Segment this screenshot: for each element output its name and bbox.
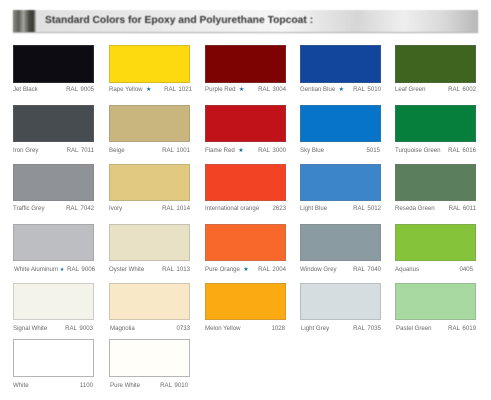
code: RAL 9003: RAL 9003: [65, 325, 93, 332]
label: White Aluminum: White Aluminum ★: [14, 266, 64, 273]
code: RAL 9006: RAL 9006: [67, 266, 95, 273]
swatch: Rape Yellow: [109, 45, 190, 83]
code: RAL 3004: RAL 3004: [258, 86, 286, 93]
label: Oyster White: Oyster White: [109, 266, 144, 273]
swatch: Pure Orange: [205, 224, 286, 261]
swatch: Pure White: [109, 339, 190, 377]
label: Gentian Blue: Gentian Blue ★: [300, 86, 344, 93]
swatch: White Aluminum: [13, 224, 94, 261]
swatch: Traffic Grey: [13, 164, 94, 201]
code: RAL 6002: RAL 6002: [448, 86, 476, 93]
swatch: Leaf Green: [395, 45, 476, 83]
swatch: Aquarius: [395, 224, 476, 261]
label: Flame Red: Flame Red ★: [205, 147, 244, 154]
swatch: Light Grey: [300, 283, 381, 320]
label: Sky Blue: Sky Blue: [300, 147, 324, 154]
code: 0733: 0733: [176, 325, 190, 332]
code: RAL 3000: RAL 3000: [258, 147, 286, 154]
swatch: Iron Grey: [13, 105, 94, 142]
code: RAL 6011: RAL 6011: [449, 205, 476, 212]
swatch: Reseda Green: [395, 164, 476, 201]
label: Melon Yellow: Melon Yellow: [205, 325, 241, 332]
swatch: Magnolia: [109, 283, 190, 320]
code: 0405: 0405: [459, 266, 473, 273]
label: Magnolia: Magnolia: [110, 325, 135, 332]
code: RAL 6019: RAL 6019: [448, 325, 476, 332]
label: Iron Grey: Iron Grey: [13, 147, 38, 154]
swatch: Signal White: [13, 283, 94, 320]
label: White: White: [13, 382, 29, 389]
title: Standard Colors for Epoxy and Polyurethane Topcoat :: [45, 15, 313, 26]
swatch: Turquoise Green: [395, 105, 476, 142]
swatch: Purple Red: [205, 45, 286, 83]
label: Pure Orange: Pure Orange ★: [205, 266, 249, 273]
swatch: Flame Red: [205, 105, 286, 142]
label: Window Grey: Window Grey: [300, 266, 337, 273]
code: RAL 6016: RAL 6016: [448, 147, 476, 154]
code: RAL 7042: RAL 7042: [66, 205, 94, 212]
swatch: Ivory: [109, 164, 190, 201]
swatch: Beige: [109, 105, 190, 142]
label: Jet Black: Jet Black: [13, 86, 38, 93]
swatch: International orange: [205, 164, 286, 201]
swatch: Light Blue: [300, 164, 381, 201]
label: Leaf Green: Leaf Green: [395, 86, 426, 93]
code: RAL 7035: RAL 7035: [353, 325, 381, 332]
code: RAL 2004: RAL 2004: [258, 266, 286, 273]
swatch: Window Grey: [300, 224, 381, 261]
label: Pure White: Pure White: [110, 382, 140, 389]
code: RAL 7040: RAL 7040: [353, 266, 381, 273]
swatch: Pastel Green: [395, 283, 476, 320]
label: Signal White: Signal White: [13, 325, 47, 332]
code: RAL 9005: RAL 9005: [66, 86, 94, 93]
swatch: Sky Blue: [300, 105, 381, 142]
label: Rape Yellow: Rape Yellow ★: [109, 86, 151, 93]
swatch: Melon Yellow: [205, 283, 286, 320]
label: Aquarius: Aquarius: [395, 266, 419, 273]
code: RAL 1013: RAL 1013: [162, 266, 190, 273]
swatch: White: [13, 339, 94, 377]
label: Light Blue: Light Blue: [300, 205, 327, 212]
label: Traffic Grey: Traffic Grey: [13, 205, 44, 212]
code: RAL 1014: RAL 1014: [162, 205, 190, 212]
label: International orange: International orange: [205, 205, 259, 212]
label: Turquoise Green: Turquoise Green: [395, 147, 441, 154]
swatch: Oyster White: [109, 224, 190, 261]
label: Purple Red: Purple Red ★: [205, 86, 244, 93]
label: Light Grey: Light Grey: [301, 325, 329, 332]
label: Beige: Beige: [109, 147, 125, 154]
code: RAL 1021: RAL 1021: [164, 86, 192, 93]
swatch: Jet Black: [13, 45, 94, 83]
code: RAL 7011: RAL 7011: [67, 147, 94, 154]
code: RAL 5010: RAL 5010: [353, 86, 381, 93]
label: Pastel Green: Pastel Green: [396, 325, 432, 332]
label: Reseda Green: Reseda Green: [395, 205, 435, 212]
code: 1100: 1100: [80, 382, 93, 389]
code: RAL 5012: RAL 5012: [353, 205, 381, 212]
code: 1028: 1028: [271, 325, 285, 332]
label: Ivory: Ivory: [109, 205, 122, 212]
header dark tab: [13, 10, 36, 32]
swatch: Gentian Blue: [300, 45, 381, 83]
code: 2623: 2623: [272, 205, 286, 212]
code: RAL 1001: RAL 1001: [162, 147, 190, 154]
header bar: [13, 10, 478, 32]
code: RAL 9010: RAL 9010: [160, 382, 188, 389]
code: 5015: 5015: [366, 147, 380, 154]
